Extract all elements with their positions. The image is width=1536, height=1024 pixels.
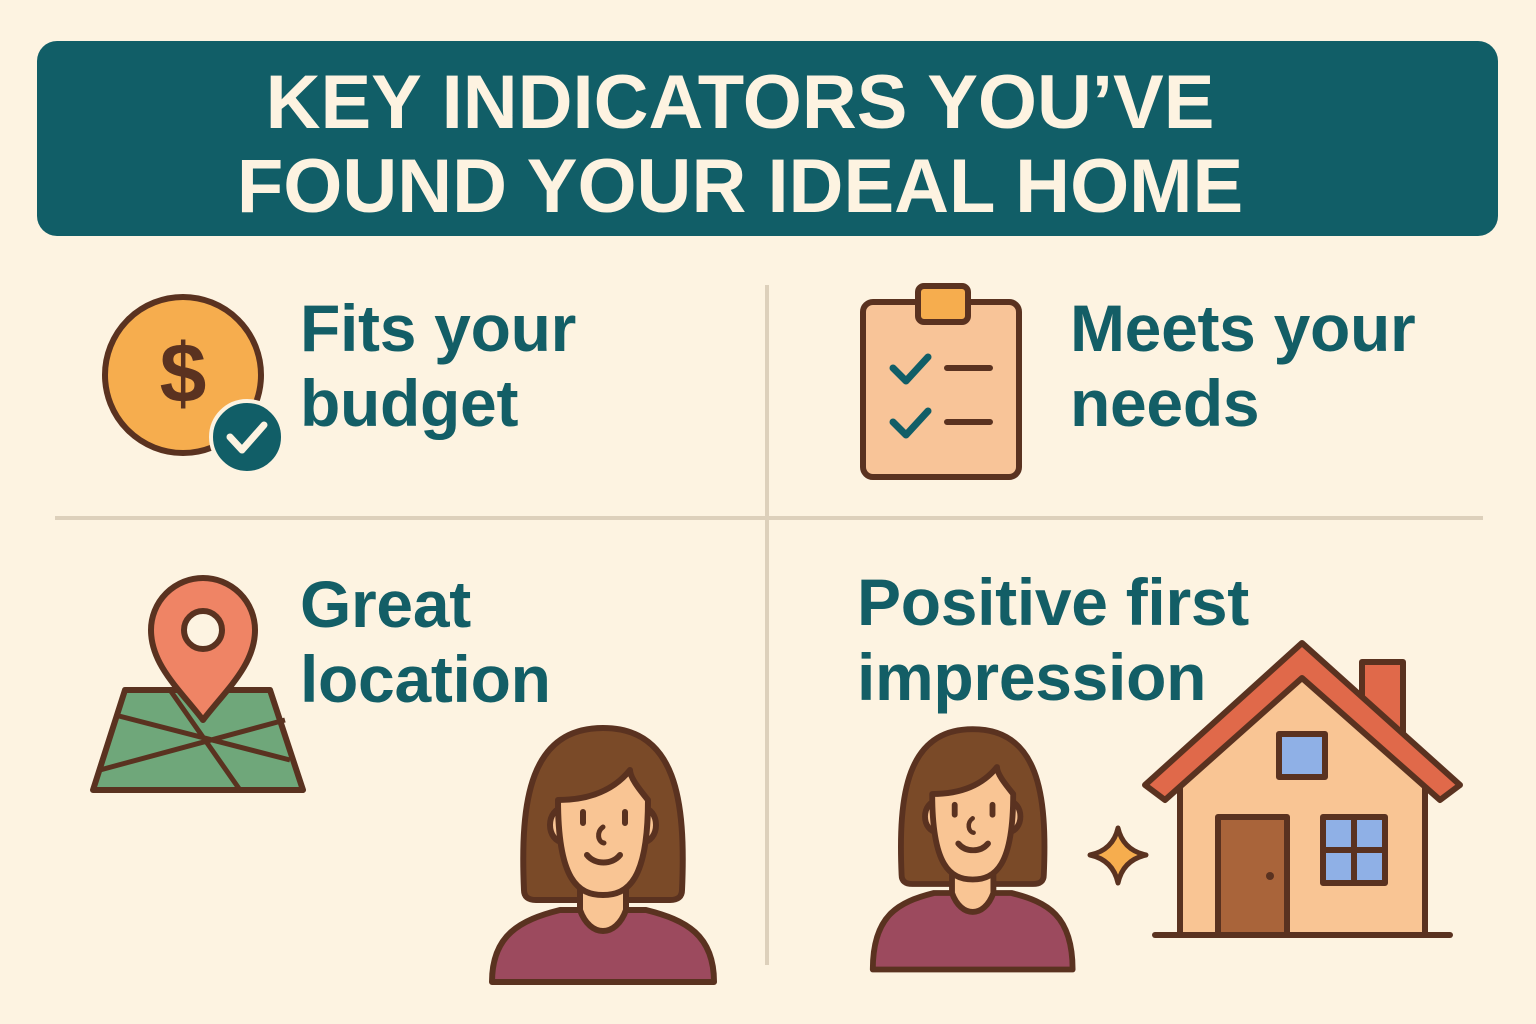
title: [237, 60, 1243, 229]
heading: meets your needs: [1070, 291, 1415, 440]
title banner: [37, 41, 1498, 236]
icon: woman 2: [873, 729, 1073, 970]
heading: great location: [300, 567, 551, 716]
icon: house: [1145, 643, 1460, 935]
icon: dollar coin with check: [105, 297, 283, 473]
title: FOUND YOUR IDEAL HOME: [237, 144, 1243, 229]
icon: clipboard checklist: [863, 286, 1019, 477]
icon: woman 1: [492, 728, 714, 982]
heading: positive first impression: impression: [857, 640, 1206, 714]
heading: great location: location: [300, 642, 551, 716]
heading: fits your budget: [300, 291, 576, 440]
icon: dollar coin with check: $: [160, 326, 206, 420]
icon: sparkle: [1090, 828, 1146, 883]
heading: fits your budget: budget: [300, 366, 518, 440]
heading: positive first impression: Positive first: [857, 565, 1249, 639]
heading: positive first impression: [857, 565, 1249, 714]
heading: great location: Great: [300, 567, 471, 641]
heading: fits your budget: Fits your: [300, 291, 576, 365]
heading: meets your needs: Meets your: [1070, 291, 1415, 365]
icon: map with pin: [93, 578, 303, 790]
heading: meets your needs: needs: [1070, 366, 1259, 440]
title: KEY INDICATORS YOU’VE: [266, 60, 1214, 145]
